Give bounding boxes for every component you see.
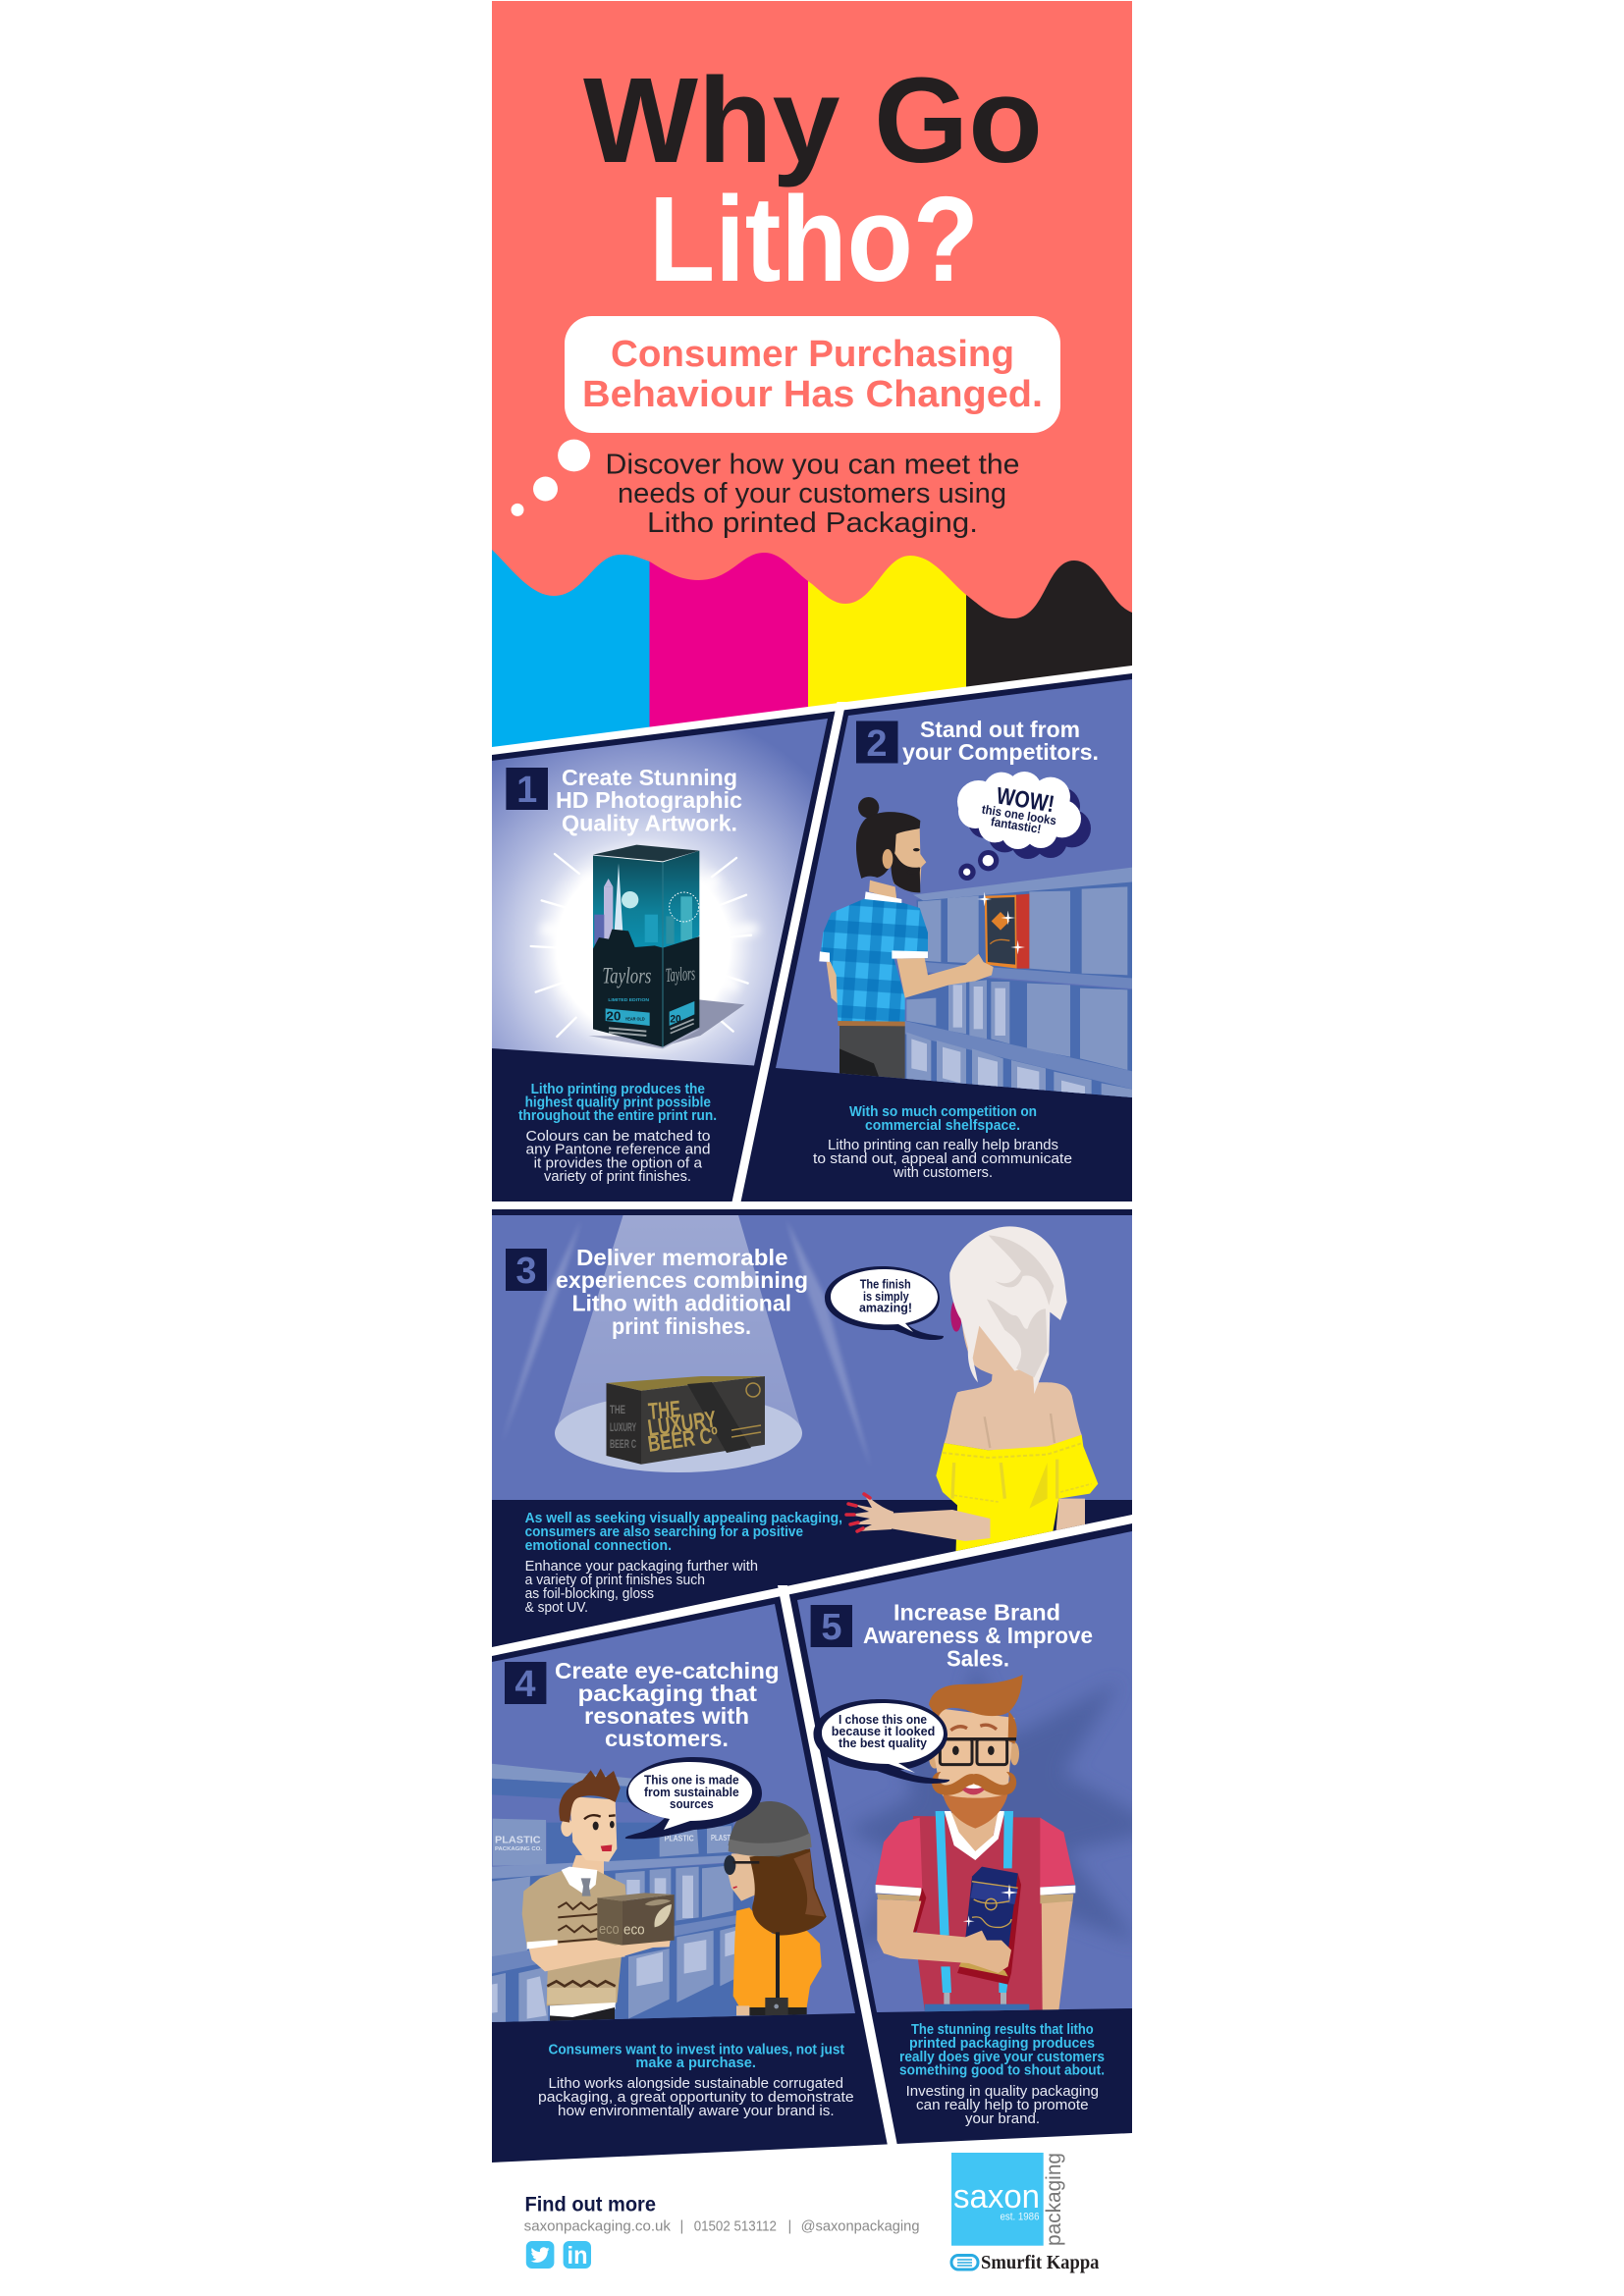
panel 4 illustration: shoppers at shelves: PLAST <box>711 1834 731 1842</box>
woman with white hair <box>936 1226 1098 1558</box>
footer: contact details: @saxonpackaging <box>801 2219 919 2235</box>
footer: contact details: saxonpackaging.co.uk <box>524 2219 672 2235</box>
intro text: needs of your customers using <box>618 478 1006 509</box>
panel 5 illustration: hipster holding box <box>854 1675 1132 2012</box>
panel 2 heading: your Competitors. <box>902 739 1099 765</box>
panel 5 background <box>797 1531 1132 2012</box>
panel 4 illustration: shoppers at shelves: PACKAGING CO. <box>495 1846 543 1852</box>
panel 5 caption: really does give your customers <box>899 2050 1105 2065</box>
footer: contact details <box>524 2219 919 2235</box>
panel 1 product box <box>531 845 753 1048</box>
panel 5 heading: Sales. <box>947 1646 1009 1672</box>
panel 2 <box>776 679 1134 1181</box>
panel 3 caption <box>525 1511 842 1616</box>
panel 4 number badge: 4 <box>514 1664 536 1705</box>
panel 5 caption: Investing in quality packaging <box>906 2084 1099 2100</box>
luxury beer box: LUXURY <box>610 1420 636 1434</box>
panel 1 heading: HD Photographic <box>556 787 742 813</box>
panel 1 caption: Litho printing produces the <box>531 1082 705 1097</box>
panel 4 caption <box>538 2043 854 2119</box>
panel 1 caption <box>518 1082 717 1185</box>
footer: contact details: | <box>679 2219 683 2235</box>
icon: linkedin: in <box>568 2242 587 2269</box>
footer: contact details: 01502 513112 <box>694 2219 777 2235</box>
intro text <box>605 450 1019 539</box>
panel 2 caption: commercial shelfspace. <box>865 1118 1020 1134</box>
subtitle banner: Consumer Purchasing <box>611 334 1014 375</box>
divider between panels 1 and 2 <box>732 702 846 1201</box>
panel 3 heading: Deliver memorable <box>576 1245 787 1270</box>
panel 2 heading: Stand out from <box>920 717 1080 742</box>
panel 3 number badge: 3 <box>515 1251 537 1292</box>
luxury beer box: LUXURY <box>646 1406 718 1442</box>
intro text: Litho printed Packaging. <box>647 507 978 539</box>
panel 1 product box: 20 <box>670 1014 681 1026</box>
panel 2 number badge <box>856 721 897 765</box>
thought bubble WOW: WOW! <box>995 782 1056 818</box>
luxury beer box <box>607 1376 765 1465</box>
panel 2 illustration: man at the shelves <box>819 797 1134 1109</box>
panel 1 product box: Taylors <box>602 964 651 989</box>
title <box>583 54 1043 307</box>
panel 5 caption <box>899 2022 1105 2127</box>
panel 1 caption: highest quality print possible <box>525 1095 711 1111</box>
panel 4 illustration: shoppers at shelves: PLASTIC <box>665 1835 694 1843</box>
panel 1 caption: throughout the entire print run. <box>518 1108 717 1124</box>
panel 3 heading: print finishes. <box>612 1313 751 1339</box>
thought bubble WOW: fantastic! <box>990 815 1042 836</box>
panel 3 number badge <box>506 1249 547 1292</box>
CMYK colour bands <box>492 540 1132 775</box>
panel 2 caption: Litho printing can really help brands <box>828 1138 1058 1153</box>
panel 2 heading <box>902 717 1099 765</box>
panel 3 caption: a variety of print finishes such <box>525 1573 705 1588</box>
panel 2 caption: With so much competition on <box>849 1104 1037 1120</box>
panel 1 number badge <box>506 768 548 811</box>
panel 4 background <box>492 1604 855 2022</box>
panel 3 speech bubble: The finish <box>860 1277 911 1292</box>
panel 5 caption: The stunning results that litho <box>911 2022 1094 2038</box>
panel 4 caption: Consumers want to invest into values, not just <box>548 2043 844 2058</box>
title: Why Go <box>583 54 1043 188</box>
header background with paint drip <box>492 1 1132 618</box>
panel 3 heading: Litho with additional <box>571 1291 791 1316</box>
panel 3 caption: consumers are also searching for a positive <box>525 1524 803 1540</box>
intro text: Discover how you can meet the <box>605 450 1019 481</box>
panel 4 heading: packaging that <box>577 1681 757 1706</box>
panel 5 number badge <box>811 1605 852 1648</box>
panel 1 caption: variety of print finishes. <box>544 1169 691 1185</box>
title: Litho? <box>649 173 979 307</box>
panel 1 glow background <box>492 719 828 1066</box>
footer: contact details: | <box>787 2219 791 2235</box>
luxury beer box: BEER C <box>610 1437 636 1451</box>
navy base for panels 1 and 2 <box>492 673 1132 1201</box>
white comic frame area <box>492 666 1132 1217</box>
panel 5 caption: printed packaging produces <box>909 2036 1095 2052</box>
panel 4 speech bubble: from sustainable <box>644 1785 739 1799</box>
smurfit kappa logo: Smurfit Kappa <box>981 2252 1100 2273</box>
panel 3 speech bubble: is simply <box>863 1289 909 1304</box>
panel 3 heading <box>556 1245 808 1339</box>
panel 4 caption: how environmentally aware your brand is. <box>558 2104 835 2119</box>
panel 5 speech bubble <box>813 1699 949 1784</box>
panel 5 caption: something good to shout about. <box>899 2063 1105 2079</box>
panel 1 number badge: 1 <box>516 770 537 811</box>
panel 5 speech bubble: because it looked <box>832 1724 935 1738</box>
panel 2 caption: with customers. <box>893 1165 993 1181</box>
subtitle banner <box>565 316 1060 433</box>
panel 4 caption: packaging, a great opportunity to demonstrate <box>538 2090 854 2106</box>
thought bubbles <box>511 440 590 516</box>
spotlight <box>502 1215 871 1472</box>
panel 4 illustration: shoppers at shelves: eco <box>623 1923 645 1939</box>
panel 5 number badge: 5 <box>821 1607 842 1648</box>
panel 4 heading: customers. <box>605 1726 729 1751</box>
panel 1 heading: Create Stunning <box>562 765 737 790</box>
panel 5 speech bubble: I chose this one <box>839 1712 927 1727</box>
footer: find out more heading: Find out more <box>524 2194 656 2216</box>
icon: twitter <box>526 2241 554 2269</box>
panel 3 caption: & spot UV. <box>525 1600 588 1616</box>
panel 5 heading: Awareness & Improve <box>863 1623 1093 1648</box>
panel 3 caption: Enhance your packaging further with <box>525 1559 758 1575</box>
panel 1 product box: Taylors <box>665 963 696 987</box>
panel 2 caption <box>813 1104 1072 1181</box>
panel 1 caption: Colours can be matched to <box>526 1129 711 1145</box>
saxon packaging logo: saxon <box>953 2178 1040 2216</box>
panel 1 <box>492 719 828 1185</box>
panel 4 number badge <box>505 1662 546 1705</box>
panel 3 navy frame and caption band <box>492 1209 1132 1647</box>
panel 1 product box: YEAR OLD <box>625 1016 645 1021</box>
panel 1 heading: Quality Artwork. <box>562 811 737 836</box>
thought bubble WOW: this one looks <box>981 803 1057 828</box>
panel 3 speech bubble: amazing! <box>859 1301 912 1315</box>
panel 1 product box: 20 <box>606 1009 621 1023</box>
thought bubble WOW <box>957 772 1091 881</box>
panel 4 heading <box>555 1658 780 1751</box>
panel 3 caption: emotional connection. <box>525 1538 672 1554</box>
luxury beer box: BEER Cº <box>646 1421 720 1457</box>
luxury beer box: THE <box>647 1396 681 1425</box>
panel 4 speech bubble: This one is made <box>644 1773 739 1788</box>
panel 2 caption: to stand out, appeal and communicate <box>813 1151 1072 1167</box>
navy base for panels 4 and 5 <box>492 1523 1132 2163</box>
panel 5 heading <box>863 1600 1093 1672</box>
panel 2 number badge: 2 <box>866 723 888 765</box>
panel 4 <box>491 1604 855 2119</box>
panel 3 <box>492 1209 1132 1647</box>
panel 3 background <box>492 1215 1132 1500</box>
saxon packaging logo <box>951 2153 1065 2246</box>
panel 5 <box>797 1531 1165 2127</box>
luxury beer box: THE <box>610 1403 625 1416</box>
panel 3 heading: experiences combining <box>556 1267 808 1293</box>
panel 4 speech bubble <box>625 1757 762 1839</box>
panel 2 background <box>776 679 1132 1097</box>
panel 1 caption: any Pantone reference and <box>526 1143 711 1158</box>
panel 4 illustration: shoppers at shelves <box>491 1764 827 2022</box>
panel 4 speech bubble: sources <box>670 1796 714 1811</box>
panel 5 heading: Increase Brand <box>893 1600 1060 1626</box>
panel 3 caption: as foil-blocking, gloss <box>525 1586 654 1602</box>
panel 4 heading: resonates with <box>584 1703 749 1729</box>
panel 4 illustration: shoppers at shelves: PLASTIC <box>495 1836 541 1846</box>
panel 1 heading <box>556 765 742 836</box>
panel 4 caption: make a purchase. <box>635 2056 756 2071</box>
panel 1 caption: it provides the option of a <box>534 1156 703 1172</box>
panel 5 caption: your brand. <box>965 2111 1040 2127</box>
panel 5 caption: can really help to promote <box>916 2098 1089 2113</box>
saxon packaging logo: est. 1986 <box>1000 2212 1039 2223</box>
panel 1 product box: LIMITED EDITION <box>608 997 649 1003</box>
subtitle banner: Behaviour Has Changed. <box>582 374 1043 415</box>
panel 4 illustration: shoppers at shelves: eco <box>599 1922 620 1938</box>
saxon packaging logo: packaging <box>1043 2153 1065 2246</box>
woman's arm and hand <box>846 1494 990 1541</box>
panel 5 speech bubble: the best quality <box>839 1735 928 1750</box>
panel 3 speech bubble <box>825 1266 944 1340</box>
panel 4 caption: Litho works alongside sustainable corrugated <box>548 2076 843 2092</box>
panel 3 caption: As well as seeking visually appealing packaging, <box>525 1511 842 1526</box>
panel 4 heading: Create eye-catching <box>555 1658 780 1683</box>
divider between panels 4 and 5 <box>778 1585 898 2150</box>
